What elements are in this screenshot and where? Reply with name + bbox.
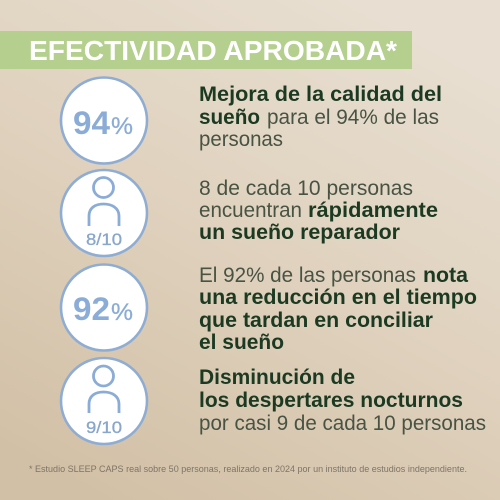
text block: 94%: sueño <box>199 106 260 129</box>
text block: 92% <box>199 264 477 354</box>
text block: 8/10: encuentran <box>199 199 302 222</box>
text block: 8/10: un sueño reparador <box>199 221 400 244</box>
text block: 94%: Mejora de la calidad del <box>199 83 442 106</box>
badge: 8/10 person: 8/10 <box>86 231 122 249</box>
text block: 94%: para el 94% de las <box>267 106 439 129</box>
badge: 94%: 94 <box>73 105 110 141</box>
text block: 94% <box>199 83 442 151</box>
text block: 92%: que tardan en conciliar <box>199 309 433 332</box>
badge: 92% <box>61 264 147 350</box>
badge: 92%: % <box>111 299 133 326</box>
badge: 9/10 person <box>61 358 147 444</box>
text block: 92%: nota <box>423 264 468 287</box>
badge: 94% <box>61 78 147 164</box>
text block: 8/10: rápidamente <box>308 199 438 222</box>
text block: 92%: el sueño <box>199 331 284 354</box>
badge: 92%: 92 <box>73 291 110 327</box>
text block: 94%: personas <box>199 128 283 151</box>
text block: 92%: una reducción en el tiempo <box>199 286 477 309</box>
text block: 8/10: 8 de cada 10 personas <box>199 177 413 200</box>
text block: 9/10 <box>199 366 486 435</box>
text block: 9/10: Disminución de <box>199 366 355 389</box>
badge: 9/10 person: 9/10 <box>86 419 122 437</box>
badge: 8/10 person <box>61 170 147 256</box>
text block: 92%: El 92% de las personas <box>199 264 416 287</box>
text block: 9/10: los despertares nocturnos <box>199 389 463 412</box>
footnote: * Estudio SLEEP CAPS real sobre 50 personas, realizado en 2024 por un instituto de estudios independiente. <box>29 464 467 475</box>
text block: 9/10: por casi 9 de cada 10 personas <box>199 412 486 435</box>
badge: 94%: % <box>111 113 133 140</box>
title banner: EFECTIVIDAD APROBADA* <box>29 35 397 66</box>
text block: 8/10 <box>199 177 438 244</box>
